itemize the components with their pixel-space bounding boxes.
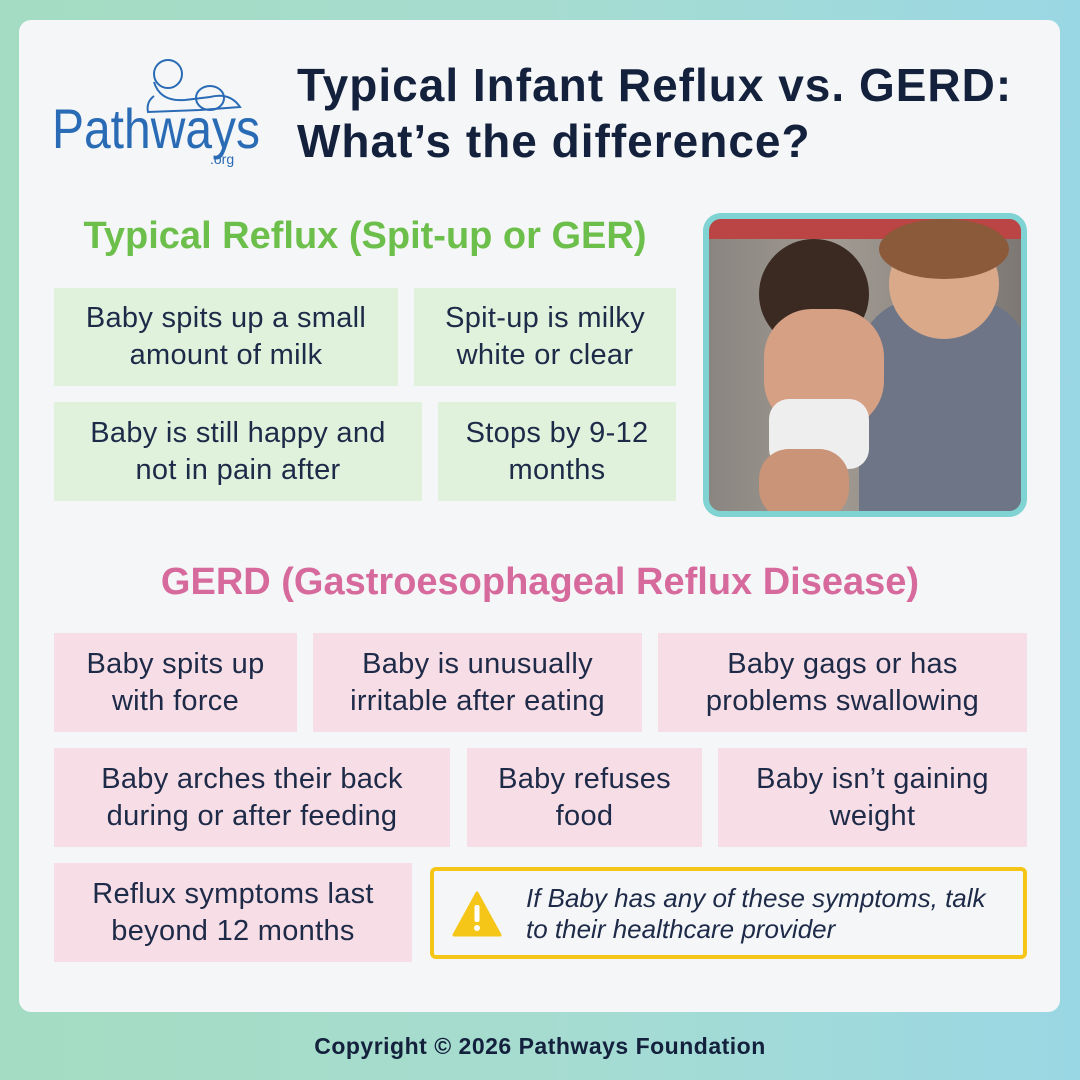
panel: GERD boxes: food: [556, 800, 613, 832]
panel: GERD boxes: irritable after eating: [350, 684, 605, 716]
panel: GERD boxes: Baby arches their back: [101, 762, 403, 794]
panel: typical reflux boxes: amount of milk: [130, 339, 322, 371]
callout: warning: to their healthcare provider: [526, 914, 835, 944]
panel: GERD boxes: [54, 633, 1027, 962]
panel: typical reflux boxes: Baby spits up a small: [86, 302, 366, 334]
panel: typical reflux boxes: Baby is still happy and: [90, 416, 386, 448]
logo: [52, 59, 260, 167]
panel: typical reflux boxes: [54, 288, 676, 501]
title: Typical Infant Reflux vs. GERD:: [297, 59, 1012, 111]
title: What’s the difference?: [297, 115, 811, 167]
footer: Copyright © 2026 Pathways Foundation: [314, 1033, 766, 1059]
panel: GERD boxes: during or after feeding: [107, 800, 397, 832]
panel: GERD boxes: Baby spits up: [86, 648, 264, 680]
panel: GERD boxes: beyond 12 months: [111, 914, 355, 946]
panel: GERD boxes: weight: [830, 800, 915, 832]
panel: GERD boxes: Reflux symptoms last: [92, 878, 374, 910]
panel: GERD boxes: with force: [112, 684, 239, 716]
logo: .org: [210, 151, 234, 167]
heading: GERD: GERD (Gastroesophageal Reflux Disease): [161, 561, 919, 603]
panel: typical reflux boxes: not in pain after: [135, 454, 340, 486]
callout: warning: [430, 867, 1027, 959]
panel: GERD boxes: Baby gags or has: [727, 648, 958, 680]
panel: GERD boxes: problems swallowing: [706, 684, 979, 716]
panel: GERD boxes: Baby refuses: [498, 762, 671, 794]
panel: GERD boxes: Baby is unusually: [362, 648, 593, 680]
photo: [703, 213, 1027, 517]
icon: warning: [452, 891, 502, 936]
panel: GERD boxes: Baby isn’t gaining: [756, 762, 989, 794]
callout: warning: If Baby has any of these symptoms, talk: [526, 883, 986, 913]
icon: baby: [148, 60, 240, 112]
panel: typical reflux boxes: Stops by 9-12: [466, 416, 648, 448]
panel: typical reflux boxes: Spit-up is milky: [445, 302, 645, 334]
panel: typical reflux boxes: white or clear: [457, 339, 633, 371]
title: [297, 59, 1012, 167]
panel: typical reflux boxes: months: [509, 454, 605, 486]
heading: typical reflux: Typical Reflux (Spit-up or GER): [84, 215, 646, 257]
